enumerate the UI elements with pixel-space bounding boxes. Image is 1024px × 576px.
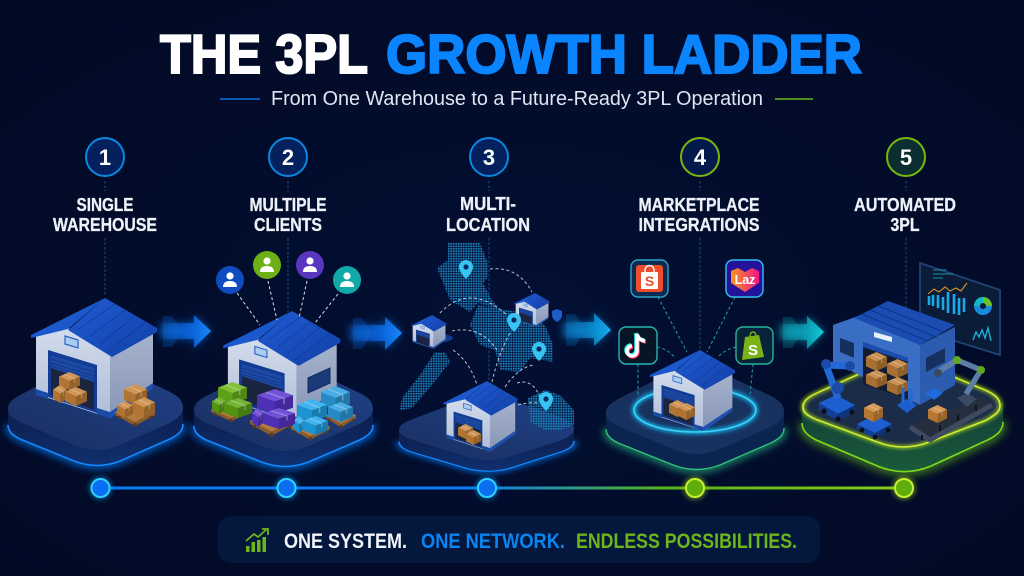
step 3 header: MULTI- — [460, 193, 516, 214]
step 5 header: 3PL — [890, 214, 920, 235]
step 2 header: 2 — [282, 145, 294, 170]
conveyor belt — [910, 397, 992, 440]
tagline text: ENDLESS POSSIBILITIES. — [576, 530, 797, 553]
step 5 header: 5 — [900, 145, 912, 170]
title: THE 3PL — [160, 23, 368, 85]
step 4 header: INTEGRATIONS — [638, 214, 760, 235]
step 4 header — [638, 138, 760, 235]
Lazada tile: Laz — [735, 273, 755, 287]
timeline — [88, 476, 916, 500]
cyan pallet — [291, 399, 330, 441]
arrow 4 — [780, 316, 824, 349]
glowing ring — [634, 388, 756, 432]
step 5 header: AUTOMATED — [854, 194, 956, 215]
step 4 header: MARKETPLACE — [638, 194, 760, 215]
Shopee tile — [631, 260, 668, 297]
step 4 header: 4 — [694, 145, 707, 170]
small warehouse right — [514, 293, 562, 327]
step 2 header: MULTIPLE — [250, 194, 326, 215]
Shopify tile — [736, 327, 773, 364]
right robot arm — [925, 356, 985, 407]
location pins — [459, 260, 553, 411]
Shopify tile: S — [748, 342, 758, 359]
step headers — [53, 138, 956, 380]
arrow 3 — [563, 313, 611, 346]
node 2 — [274, 476, 298, 500]
scene 1: single warehouse — [8, 298, 183, 466]
client icons — [216, 251, 361, 294]
step 1 header — [53, 138, 157, 235]
step 1 header: SINGLE — [76, 194, 134, 215]
scene 3: multi-location — [399, 243, 574, 471]
step 1 header: WAREHOUSE — [53, 214, 157, 235]
route lines — [440, 269, 540, 405]
node 3 — [475, 476, 499, 500]
TikTok tile — [619, 327, 657, 364]
step 3 header: LOCATION — [446, 214, 530, 235]
tagline text — [284, 530, 797, 553]
arrow 1 — [160, 315, 211, 348]
step 5 header — [854, 138, 956, 235]
small warehouse left — [411, 315, 453, 349]
client connectors — [237, 281, 338, 325]
dashboard screen — [920, 263, 1000, 355]
subtitle: From One Warehouse to a Future-Ready 3PL Operation — [271, 88, 763, 110]
AGV cart with box — [857, 403, 892, 439]
green pallet — [211, 382, 252, 422]
purple pallet — [250, 389, 295, 437]
step 2 header: CLIENTS — [254, 214, 322, 235]
title: GROWTH LADDER — [386, 23, 862, 85]
automated warehouse building — [833, 301, 955, 405]
light blue pallet — [321, 386, 356, 428]
title — [160, 23, 862, 85]
arrow 2 — [350, 317, 402, 350]
connectors — [638, 297, 753, 397]
tagline banner — [218, 516, 820, 563]
icon: growth chart — [246, 529, 268, 552]
node 1 — [88, 476, 112, 500]
Shopee tile: S — [645, 273, 654, 289]
tagline text: ONE SYSTEM. — [284, 530, 407, 553]
Lazada tile — [726, 260, 763, 297]
tagline text: ONE NETWORK. — [421, 530, 565, 553]
node 5 — [892, 476, 916, 500]
step 1 header: 1 — [99, 145, 111, 170]
dotted map — [400, 243, 553, 410]
side window — [308, 368, 330, 393]
scene 4: marketplace integrations — [606, 260, 784, 470]
forklift robot — [897, 388, 917, 413]
step 3 header — [446, 138, 530, 235]
scene 5: automated 3PL — [802, 263, 1003, 472]
scene 2: multiple clients — [194, 251, 373, 466]
left robot arm — [819, 359, 855, 422]
step 3 header: 3 — [483, 145, 495, 170]
step 2 header — [250, 138, 326, 235]
node 4 — [683, 476, 707, 500]
